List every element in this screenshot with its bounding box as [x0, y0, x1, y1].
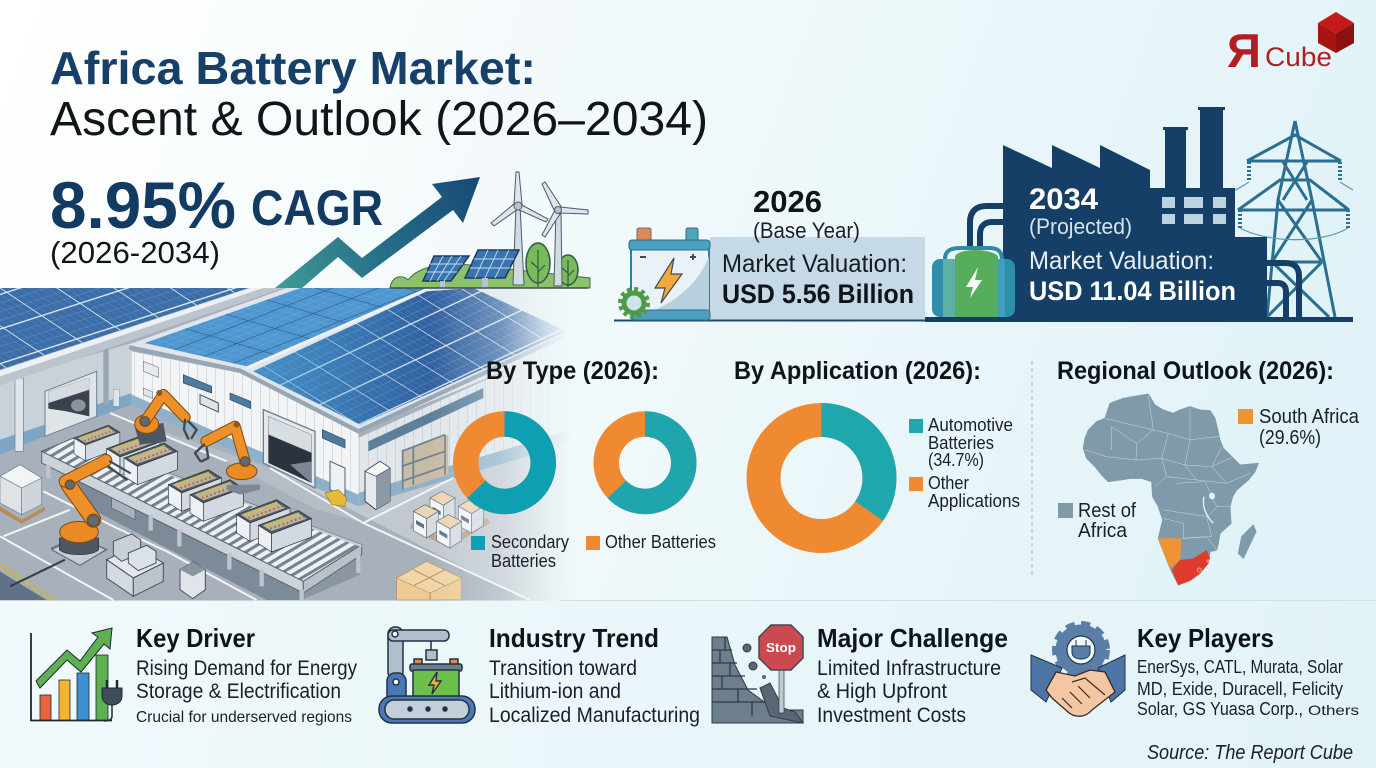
logo: Cube	[1265, 42, 1332, 72]
panel: 2034 projected valuation: Market Valuation:	[1029, 247, 1214, 275]
panel: major challenge	[712, 623, 1008, 727]
panel: 2026 base year valuation: USD 5.56 Billion	[722, 279, 914, 309]
panel: key driver: Key Driver	[136, 623, 255, 653]
panel: key driver: Storage & Electrification	[136, 680, 341, 703]
panel: 2034 projected valuation: USD 11.04 Billion	[1029, 276, 1236, 306]
stock: pallets, rack, cabinet, boxes	[0, 465, 205, 599]
panel: 2026 base year valuation: 2026	[753, 184, 822, 219]
icon: green storage tank	[932, 248, 1015, 317]
illustration: battery factory with solar roof and robots	[0, 288, 600, 601]
panel: key driver: Crucial for underserved regions	[136, 709, 352, 726]
left building	[0, 288, 283, 455]
conveyor	[42, 438, 362, 600]
map: Africa	[1083, 394, 1258, 585]
panel: 2034 projected valuation: (Projected)	[1029, 214, 1132, 239]
panel: 2034 projected valuation	[925, 107, 1353, 322]
legend: by application: Applications	[928, 491, 1020, 511]
legend: by application: Other	[928, 473, 969, 493]
donut chart: by type 2	[606, 424, 684, 501]
panel: key driver	[31, 623, 357, 726]
icon: transmission tower	[1225, 121, 1353, 317]
CAGR callout: CAGR	[251, 180, 383, 236]
legend: regional: Rest of	[1078, 500, 1136, 522]
icon: robot arm assembling battery	[379, 627, 475, 723]
panel: key players: MD, Exide, Duracell, Felicity	[1137, 679, 1343, 699]
panel: industry trend: Transition toward	[489, 657, 637, 680]
title	[50, 42, 708, 146]
CAGR callout	[50, 168, 383, 270]
CAGR callout: (2026-2034)	[50, 235, 220, 270]
icon: wind turbines, solar panels and trees	[390, 172, 590, 288]
factory windows	[1162, 197, 1226, 224]
legend: by application: Batteries	[928, 433, 994, 453]
title: Ascent & Outlook (2026–2034)	[50, 93, 708, 146]
panel: key players	[1031, 623, 1359, 719]
source: Source: The Report Cube	[1147, 742, 1353, 764]
legend: regional: South Africa	[1259, 406, 1360, 428]
legend: by type: Other Batteries	[605, 532, 716, 552]
panel: major challenge: Limited Infrastructure	[817, 657, 1001, 680]
ground markings	[0, 413, 530, 600]
panel: industry trend: Lithium-ion and	[489, 680, 621, 703]
robot arms	[52, 390, 260, 565]
panel: major challenge: Investment Costs	[817, 704, 966, 727]
icon: growth arrow	[275, 177, 480, 288]
legend: by type	[471, 532, 716, 571]
icon: crumbling wall with stop sign	[712, 625, 803, 723]
legend: regional: Africa	[1078, 520, 1128, 542]
icon: battery	[620, 228, 710, 320]
logo: Я	[1227, 24, 1261, 77]
legend: by application: Automotive	[928, 415, 1013, 435]
legend: by application: (34.7%)	[928, 450, 984, 470]
icon: gear and handshake	[1031, 624, 1125, 716]
panel: key driver: Rising Demand for Energy	[136, 657, 357, 680]
batteries on conveyor	[74, 425, 312, 552]
donut chart: by type 1	[466, 424, 543, 501]
icon: crumbling wall with stop sign: Stop	[766, 640, 796, 655]
factory silhouette	[1003, 107, 1267, 318]
panel: key players: EnerSys, CATL, Murata, Solar	[1137, 657, 1343, 677]
panel: major challenge: & High Upfront	[817, 680, 947, 703]
panel: 2026 base year valuation: (Base Year)	[753, 218, 860, 243]
heading: by type: By Type (2026):	[486, 357, 659, 385]
legend: by type: Batteries	[491, 551, 556, 571]
white factory hall	[128, 288, 600, 506]
panel: 2034 projected valuation: 2034	[1029, 183, 1098, 216]
panel: key players: Key Players	[1137, 623, 1274, 653]
panel: key players: Others	[1308, 702, 1359, 718]
CAGR callout: 8.95%	[50, 168, 236, 242]
panel: key players: Solar, GS Yuasa Corp.,	[1137, 699, 1303, 719]
panel: 2026 base year valuation: Market Valuation:	[722, 250, 907, 278]
legend: by application	[909, 415, 1020, 511]
panel: major challenge: Major Challenge	[817, 623, 1008, 653]
icon: growth chart with plug	[31, 628, 122, 721]
heading: by application: By Application (2026):	[734, 357, 981, 385]
legend: by type: Secondary	[491, 532, 569, 552]
legend: regional	[1058, 406, 1360, 542]
logo	[1227, 12, 1354, 77]
heading: regional outlook: Regional Outlook (2026):	[1057, 357, 1334, 385]
panel: industry trend: Localized Manufacturing	[489, 704, 700, 727]
panel: 2026 base year valuation	[614, 184, 925, 320]
donut chart: by application	[764, 420, 880, 536]
title: Africa Battery Market:	[50, 42, 536, 94]
legend: regional: (29.6%)	[1259, 427, 1321, 449]
panel: industry trend: Industry Trend	[489, 623, 659, 653]
panel: industry trend	[379, 623, 700, 727]
